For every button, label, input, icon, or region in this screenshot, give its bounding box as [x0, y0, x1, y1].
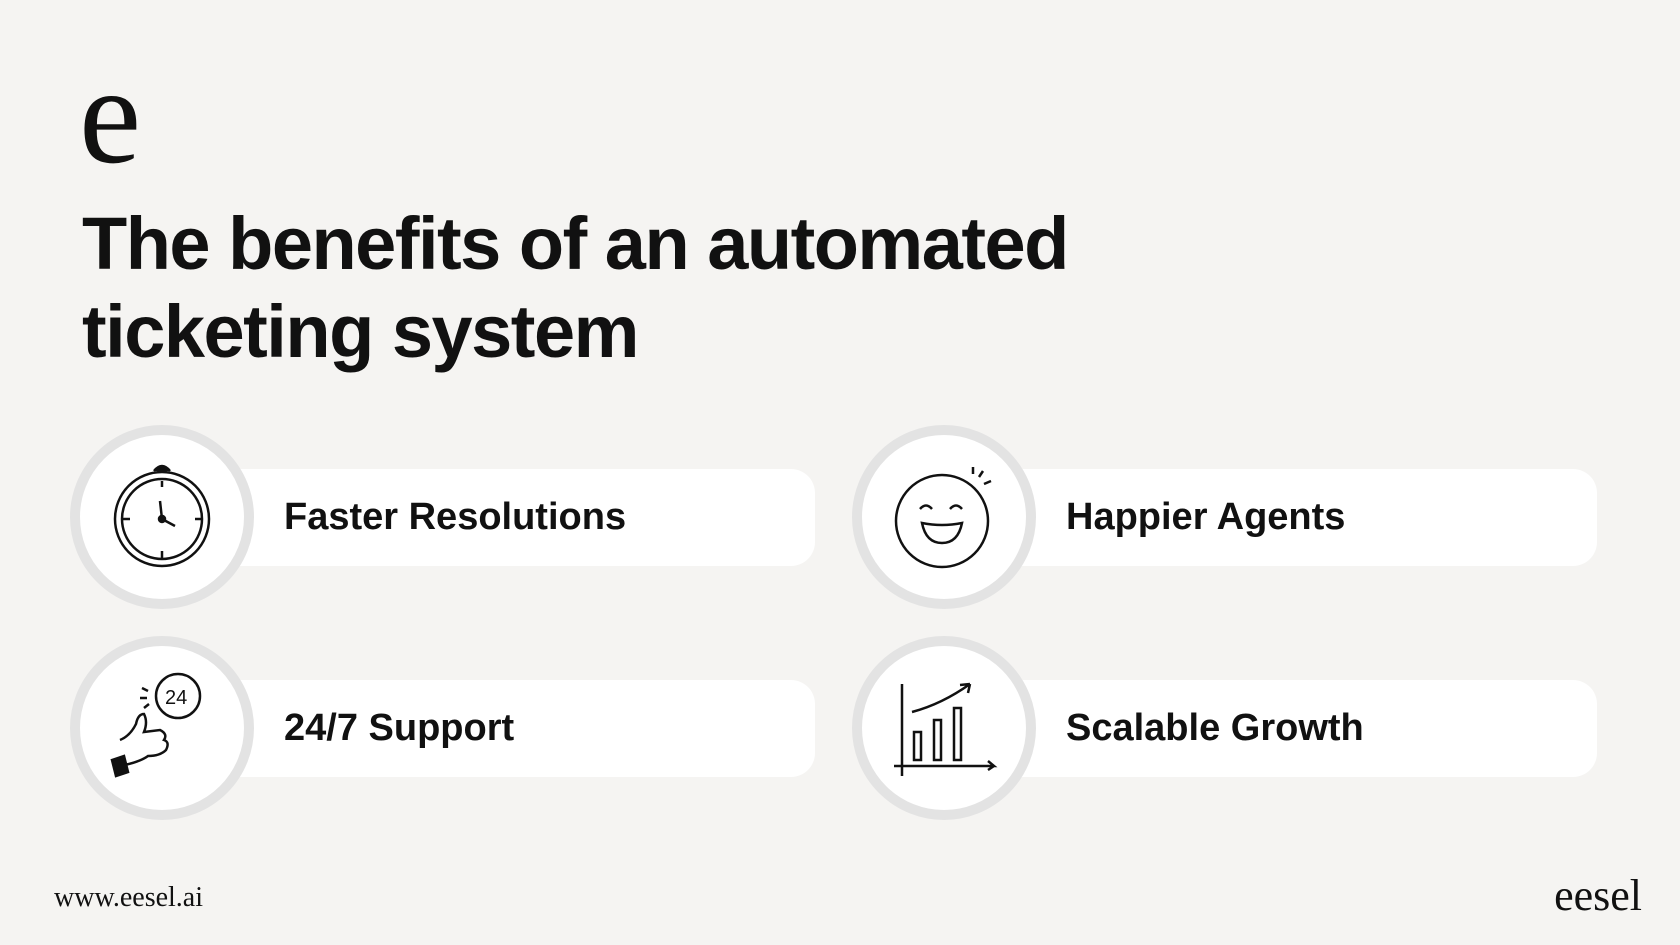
label: Faster Resolutions	[284, 496, 626, 538]
card: 24/7 support	[70, 636, 815, 820]
card: scalable growth	[852, 636, 1597, 820]
logo e: e	[79, 38, 141, 193]
icon: smiley	[852, 425, 1036, 609]
footer url: www.eesel.ai	[54, 882, 203, 913]
label: Happier Agents	[1066, 496, 1345, 538]
title	[82, 202, 1068, 373]
footer logo: eesel	[1554, 871, 1642, 920]
card: faster resolutions	[70, 425, 815, 609]
icon: thumbs up 24: 24	[165, 687, 187, 709]
icon: bar chart	[852, 636, 1036, 820]
title: ticketing system	[82, 290, 638, 373]
label: Scalable Growth	[1066, 707, 1364, 749]
label: 24/7 Support	[284, 707, 514, 749]
card: happier agents	[852, 425, 1597, 609]
title: The benefits of an automated	[82, 202, 1068, 285]
icon: thumbs up 24	[70, 636, 254, 820]
icon: stopwatch	[70, 425, 254, 609]
